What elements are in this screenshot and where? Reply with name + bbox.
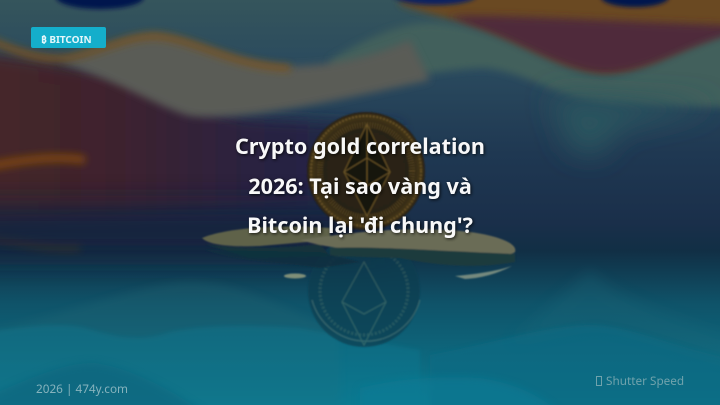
- main coin: [307, 112, 425, 230]
- photo credit: Shutter Speed: [606, 373, 684, 389]
- left dark-red wave: [0, 50, 400, 225]
- title: Crypto gold correlation: [235, 132, 485, 161]
- orange edge of cream wave: [0, 36, 290, 68]
- title: [235, 132, 486, 241]
- lower teal waves: [0, 270, 720, 405]
- footer: year and site: 2026 | 474y.com: [36, 381, 128, 397]
- title: 2026: Tại sao vàng và: [248, 172, 472, 201]
- left lower orange streak: [0, 236, 80, 248]
- left orange streak: [0, 158, 85, 168]
- central cream wave: [60, 35, 430, 117]
- top-right red wave: [400, 0, 720, 76]
- right lower teal glow: [550, 95, 720, 155]
- right gray-green wave: [330, 23, 720, 108]
- coin stack at the base: [202, 226, 515, 279]
- badge: Bitcoin category: [31, 27, 106, 48]
- title: Bitcoin lại 'đi chung'?: [247, 211, 473, 240]
- top dark blue blobs: [56, 0, 669, 9]
- coin reflection: [308, 235, 420, 347]
- badge: Bitcoin category: ₿ BITCOIN: [41, 32, 92, 46]
- dark fade under the left region: [0, 205, 380, 255]
